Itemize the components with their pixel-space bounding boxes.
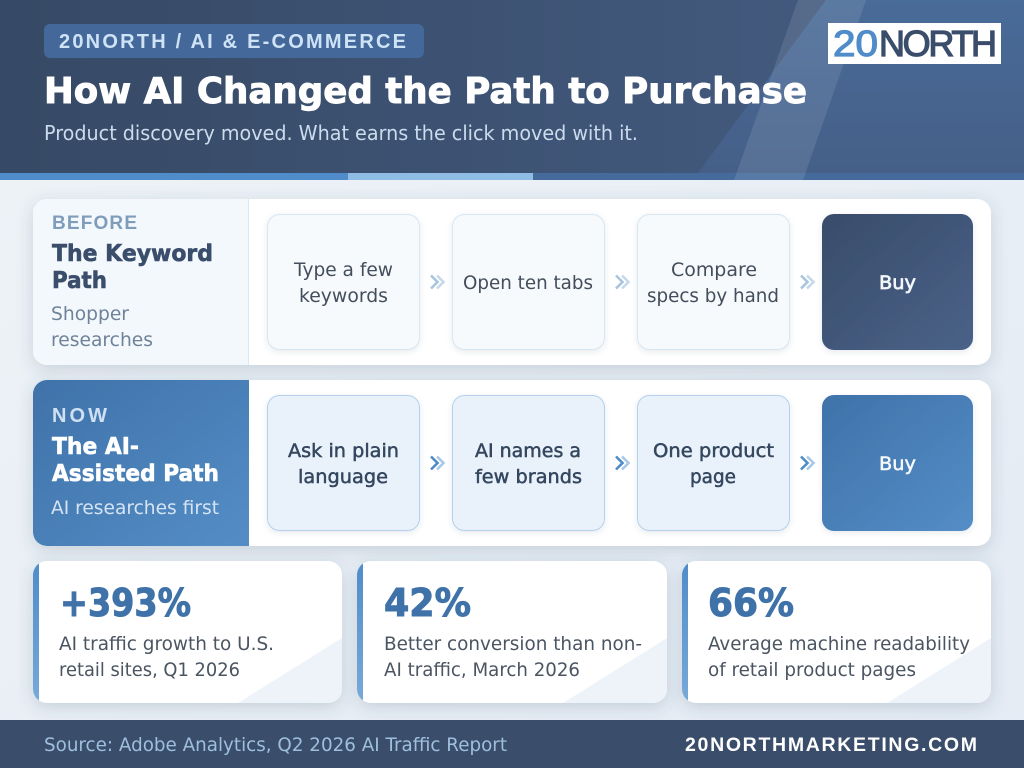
title: How AI Changed the Path to Purchase (44, 71, 807, 112)
step: ask in plain language: language (298, 466, 388, 488)
now label panel (33, 380, 249, 546)
step: buy (822, 214, 973, 350)
panel: before, the keyword path (33, 199, 991, 365)
step: one product page: One product (653, 440, 774, 462)
before label panel: BEFORE (52, 213, 137, 234)
step: buy (822, 395, 973, 531)
arrow (616, 276, 628, 288)
step: buy: Buy (879, 453, 916, 475)
logo: NORTH (879, 23, 997, 64)
step: open ten tabs (452, 214, 604, 350)
stat card: +393%: +393% (60, 581, 191, 625)
before label panel: The Keyword (52, 241, 213, 267)
step: ask in plain language (268, 396, 420, 530)
before label panel: Shopper (51, 303, 129, 325)
stat card: 42%: 42% (384, 581, 471, 625)
panel: now, the AI-assisted path (33, 380, 991, 546)
stat card: 66%: Average machine readability (708, 633, 970, 655)
stat card: +393%: retail sites, Q1 2026 (59, 659, 240, 681)
step: ask in plain language: Ask in plain (288, 440, 399, 462)
stat card: 66%: of retail product pages (708, 659, 916, 681)
step: buy: Buy (879, 272, 916, 294)
stat card: 66%: 66% (708, 581, 794, 625)
step: AI names a few brands: few brands (475, 466, 582, 488)
arrow (801, 456, 814, 470)
arrow (616, 456, 628, 470)
category tag (44, 24, 424, 58)
subtitle: Product discovery moved. What earns the click moved with it. (44, 121, 638, 145)
stat card: 42%: AI traffic, March 2026 (384, 659, 580, 681)
arrow (801, 276, 814, 288)
footer (0, 720, 1024, 768)
stat card: +393% (33, 561, 342, 703)
stat card: 42%: Better conversion than non- (384, 633, 642, 655)
step: AI names a few brands (452, 396, 604, 530)
step: compare specs by hand (638, 214, 790, 350)
logo (828, 23, 1001, 64)
arrow (431, 456, 444, 470)
source line: Source: Adobe Analytics, Q2 2026 AI Traffic Report (44, 734, 507, 756)
now label panel: AI researches first (51, 497, 219, 519)
step: type a few keywords: Type a few (293, 259, 393, 281)
before label panel: Path (52, 268, 107, 294)
now label panel: NOW (52, 405, 107, 427)
step: one product page (638, 396, 790, 530)
website: 20NORTHMARKETING.COM (685, 734, 977, 756)
logo: 20 (833, 23, 878, 64)
stat card: 66% (682, 561, 991, 703)
stat card: +393%: AI traffic growth to U.S. (59, 633, 274, 655)
header banner (0, 0, 1024, 180)
step: type a few keywords (268, 214, 420, 350)
step: open ten tabs: Open ten tabs (463, 272, 593, 294)
stat card: 42% (357, 561, 667, 703)
arrow (431, 276, 444, 288)
step: one product page: page (690, 466, 736, 488)
step: AI names a few brands: AI names a (475, 440, 581, 462)
now label panel: The AI- (52, 434, 139, 460)
step: type a few keywords: keywords (299, 285, 388, 307)
category tag: 20NORTH / AI & E-COMMERCE (59, 31, 406, 53)
step: compare specs by hand: Compare (671, 259, 757, 281)
now label panel: Assisted Path (52, 461, 219, 487)
before label panel: researches (51, 329, 153, 351)
step: compare specs by hand: specs by hand (647, 285, 779, 307)
before label panel (33, 199, 249, 365)
